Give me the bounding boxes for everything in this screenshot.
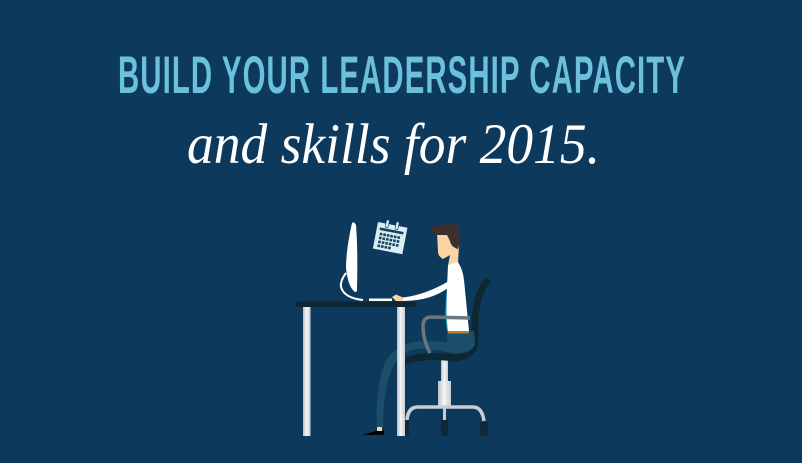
monitor stand: [341, 273, 363, 300]
belt: [448, 331, 469, 334]
shoe: [362, 430, 384, 435]
chair centre stem: [443, 407, 446, 421]
hair: [429, 223, 460, 249]
chair: [405, 282, 488, 436]
chair column base: [438, 381, 451, 407]
person upper body: [392, 223, 470, 353]
monitor screen: [346, 222, 357, 292]
chair wheels: [405, 420, 488, 436]
shirt: [447, 262, 469, 331]
desk leg right: [397, 306, 405, 436]
face: [437, 230, 459, 266]
desk: [295, 302, 475, 436]
hand: [392, 294, 403, 301]
shirt edge: [445, 268, 452, 331]
trousers: [377, 331, 475, 428]
keyboard: [369, 298, 392, 301]
chair column: [441, 360, 448, 382]
illustration: person working at desk: [295, 218, 488, 436]
icon: calendar: [373, 218, 408, 254]
armrest: [423, 317, 470, 353]
desk leg left: [303, 306, 310, 436]
chair back and seat: [405, 282, 487, 361]
arm: [403, 281, 449, 301]
subtitle: and skills for 2015: and skills for 2015.: [187, 113, 600, 176]
desk top: [295, 302, 416, 307]
sock: [377, 427, 382, 431]
computer monitor: [341, 222, 392, 301]
chair star base: [407, 407, 484, 421]
